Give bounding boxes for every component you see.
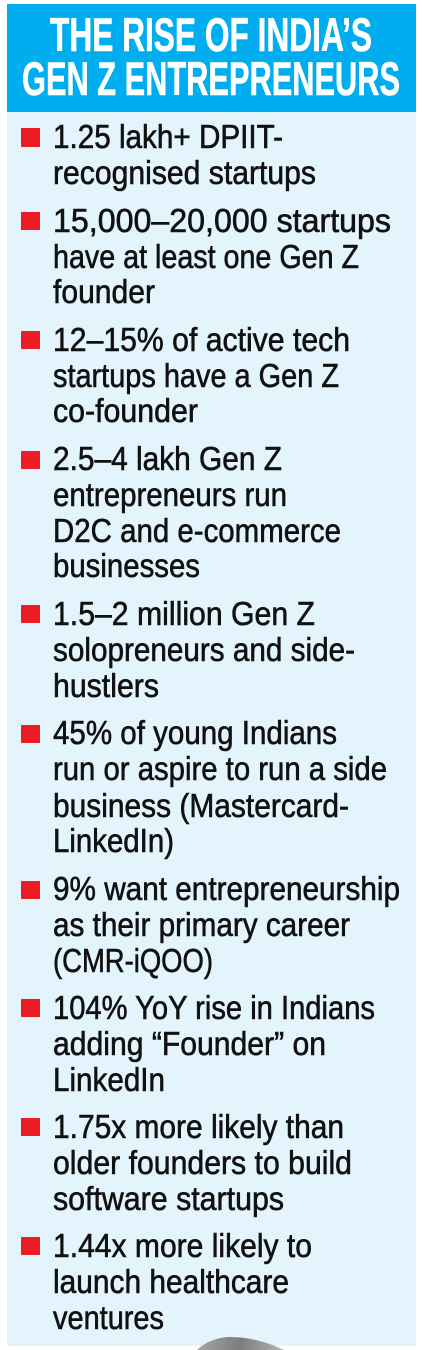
bullet: software startups likelihood: older founders to build	[53, 1144, 352, 1181]
bullet: tech startups with Gen Z co-founder: 12–15% of active tech	[53, 321, 350, 358]
bullet: tech startups with Gen Z co-founder: startups have a Gen Z	[53, 357, 339, 394]
bullet: side business aspirations: 45% of young Indians	[53, 714, 337, 751]
bullet: solopreneurs and side-hustlers: solopreneurs and side-	[53, 631, 355, 668]
bullet: startups with Gen Z founder: 15,000–20,000 startups	[53, 202, 391, 239]
bullet: D2C and e-commerce entrepreneurs: 2.5–4 lakh Gen Z	[53, 440, 282, 477]
bullet: D2C and e-commerce entrepreneurs: businesses	[53, 547, 200, 584]
bullet: side business aspirations	[21, 714, 387, 859]
bullet: Founder on LinkedIn rise	[21, 989, 375, 1098]
bullet: Founder on LinkedIn rise: 104% YoY rise in Indians	[53, 989, 375, 1026]
bullet: startups with Gen Z founder	[21, 202, 391, 310]
bullet: solopreneurs and side-hustlers: hustlers	[53, 667, 159, 704]
bullet: healthcare ventures likelihood: 1.44x more likely to	[53, 1227, 312, 1264]
bullet: solopreneurs and side-hustlers: 1.5–2 million Gen Z	[53, 595, 315, 632]
bullet: Founder on LinkedIn rise: LinkedIn	[53, 1061, 165, 1098]
bullet: Founder on LinkedIn rise: adding “Founder” on	[53, 1025, 326, 1062]
bullet: software startups likelihood	[21, 1108, 352, 1217]
bullet: healthcare ventures likelihood: ventures	[53, 1299, 164, 1336]
bullet: side business aspirations: run or aspire to run a side	[53, 750, 387, 787]
photo fragment: top of head	[197, 1337, 284, 1350]
bullet: tech startups with Gen Z co-founder	[21, 321, 350, 429]
bullet: healthcare ventures likelihood: launch healthcare	[53, 1263, 289, 1300]
bullet: DPIIT-recognised startups	[21, 118, 316, 191]
bullet: D2C and e-commerce entrepreneurs	[21, 440, 341, 584]
bullet: D2C and e-commerce entrepreneurs: D2C and e-commerce	[53, 512, 341, 549]
bullet: startups with Gen Z founder: founder	[53, 273, 155, 310]
bullet: side business aspirations: business (Mastercard-	[53, 787, 349, 824]
bullet: entrepreneurship as primary career: as their primary career	[53, 906, 350, 943]
bullet: DPIIT-recognised startups: 1.25 lakh+ DPIIT-	[53, 118, 283, 155]
bullet: solopreneurs and side-hustlers	[21, 595, 355, 704]
bullet: startups with Gen Z founder: have at least one Gen Z	[53, 238, 359, 275]
bullet: healthcare ventures likelihood	[21, 1227, 312, 1336]
bullet: software startups likelihood: 1.75x more likely than	[53, 1108, 344, 1145]
bullet: D2C and e-commerce entrepreneurs: entrepreneurs run	[53, 476, 287, 513]
bullet: entrepreneurship as primary career: (CMR-iQOO)	[53, 942, 213, 979]
bullet: entrepreneurship as primary career	[21, 870, 400, 979]
header band with title	[7, 4, 416, 112]
bullet: software startups likelihood: software startups	[53, 1180, 284, 1217]
bullet: side business aspirations: LinkedIn)	[53, 822, 174, 859]
bullet: DPIIT-recognised startups: recognised startups	[53, 154, 316, 191]
bullet: tech startups with Gen Z co-founder: co-founder	[53, 392, 198, 429]
